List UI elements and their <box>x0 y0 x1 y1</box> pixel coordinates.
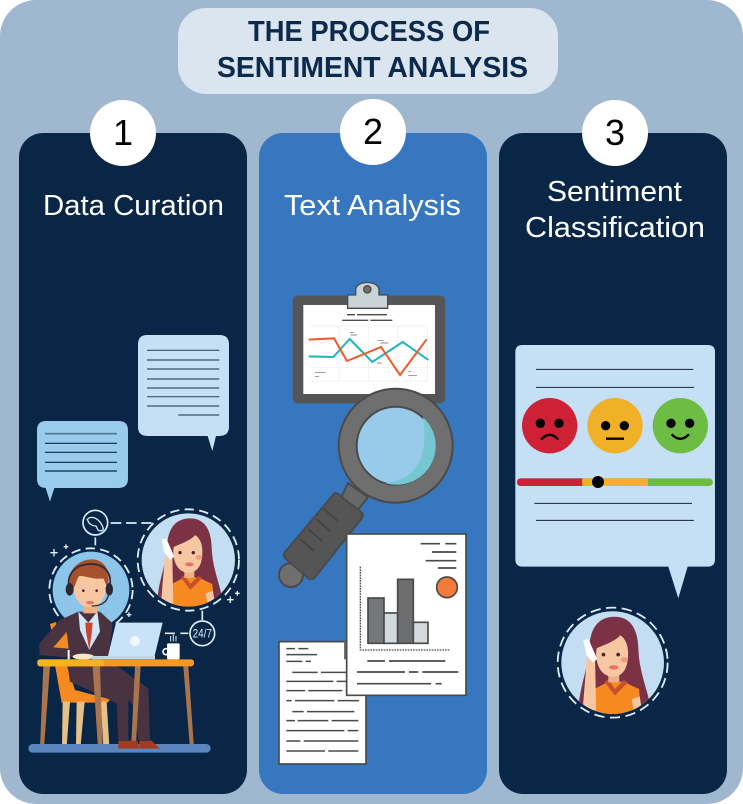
title: SENTIMENT ANALYSIS <box>217 52 528 84</box>
customer avatar <box>138 509 239 611</box>
icon: neutral face <box>587 398 643 453</box>
illustration: small text document <box>279 642 366 764</box>
illustration: call centre agent and customer <box>28 509 240 753</box>
mug <box>163 635 180 659</box>
number badge 2: 2 <box>363 111 383 152</box>
icon: phone <box>83 510 108 535</box>
agent head <box>83 600 97 613</box>
agent legs <box>67 660 150 740</box>
heading: data curation: Data Curation <box>43 190 224 222</box>
customer avatar <box>558 608 668 718</box>
panel: text analysis <box>259 99 487 794</box>
illustration: bar chart report <box>344 534 466 695</box>
illustration: magnifying glass <box>279 389 453 587</box>
illustration: clipboard with line chart <box>293 282 445 403</box>
sentiment speech bubble <box>515 345 715 598</box>
number badge 3: 3 <box>605 112 625 153</box>
title: THE PROCESS OF <box>248 16 490 48</box>
speech bubble: small <box>37 421 128 502</box>
chair <box>55 665 111 703</box>
panel: sentiment classification <box>499 100 727 794</box>
icon: happy face <box>653 398 708 453</box>
floor <box>28 744 211 753</box>
number badge 3 <box>582 100 648 166</box>
heading: sentiment classification: Classification <box>525 212 705 244</box>
icon: 24/7 <box>190 621 215 646</box>
icon: sad face <box>522 398 577 453</box>
heading: sentiment classification: Sentiment <box>547 176 682 208</box>
sentiment slider <box>517 476 713 488</box>
agent avatar circle <box>49 548 133 632</box>
agent shoes <box>118 741 160 749</box>
laptop <box>92 623 163 659</box>
panel: data curation <box>19 100 247 794</box>
number badge 2 <box>340 99 406 165</box>
heading: text analysis: Text Analysis <box>284 190 461 222</box>
heading: sentiment classification <box>525 176 705 244</box>
speech bubble: large <box>138 335 229 451</box>
desk <box>37 659 194 748</box>
title <box>178 8 558 94</box>
icon: 24/7: 24/7 <box>193 627 212 641</box>
number badge 1: 1 <box>113 112 133 153</box>
agent torso <box>39 612 113 657</box>
number badge 1 <box>90 100 156 166</box>
